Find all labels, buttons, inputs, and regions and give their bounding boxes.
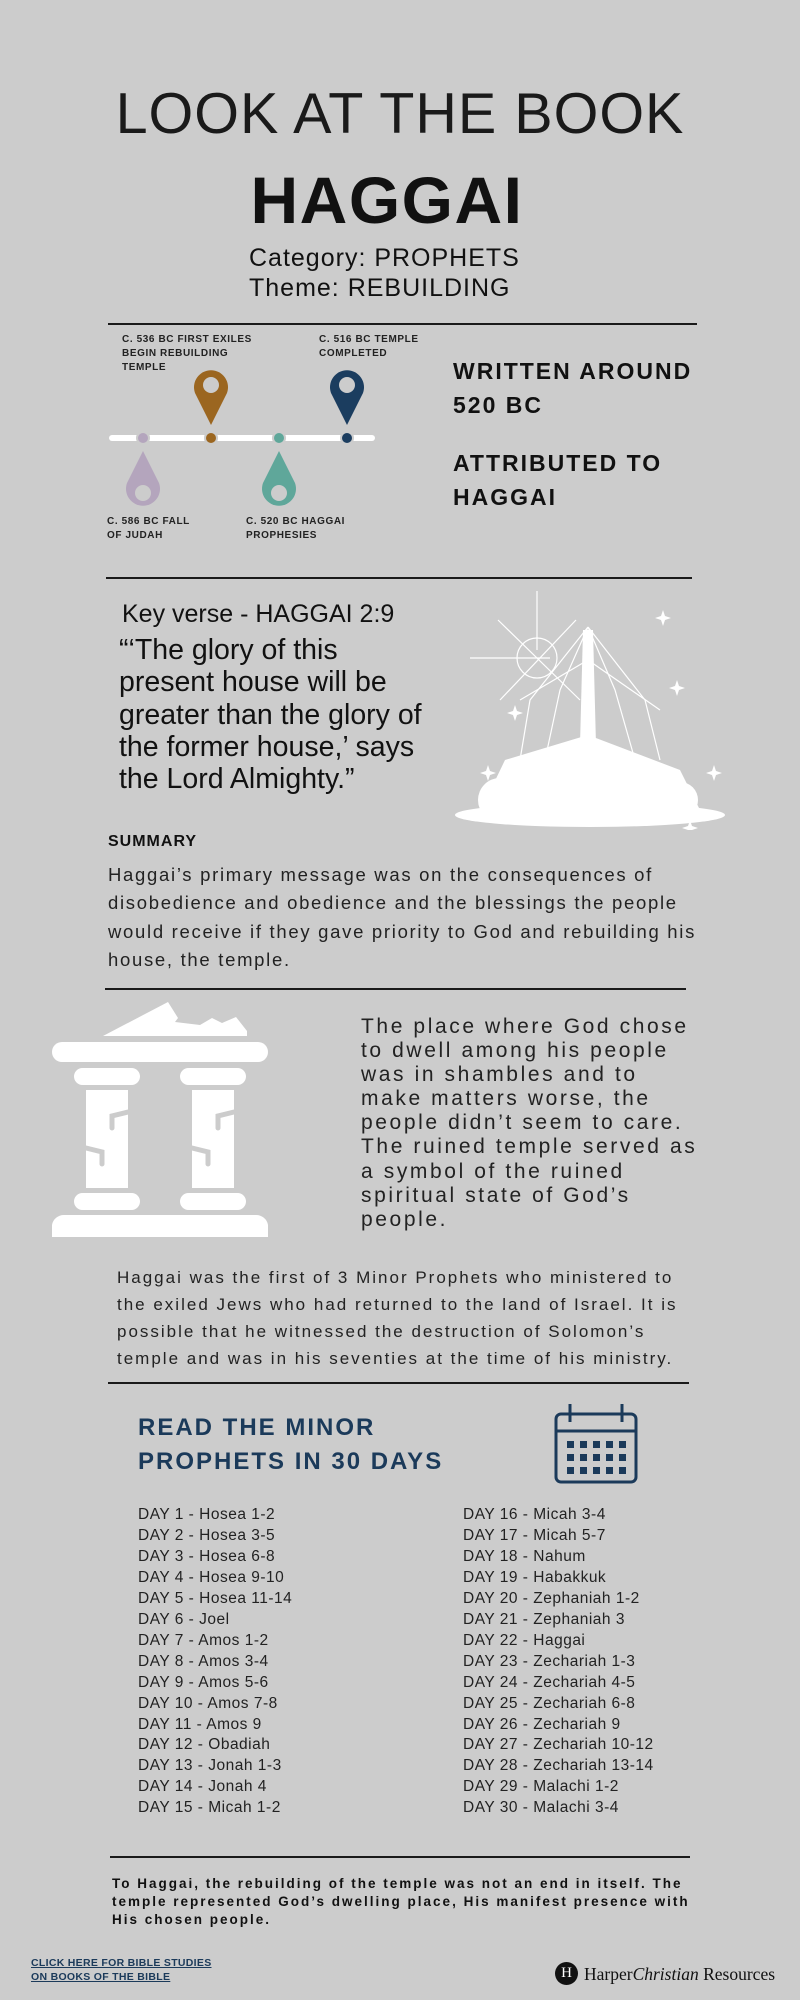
written around: 520 BC <box>453 392 543 418</box>
category and theme <box>249 244 520 302</box>
key verse quote <box>119 634 422 795</box>
Haggai background paragraph: temple and was in his seventies at the time of his ministry. <box>117 1349 673 1368</box>
summary text <box>108 864 696 970</box>
attributed to: ATTRIBUTED TO <box>453 450 662 476</box>
ruined temple paragraph: make matters worse, the <box>361 1087 651 1110</box>
icon: temple in clouds <box>455 591 725 830</box>
timeline labels top: C. 536 BC FIRST EXILES <box>122 334 252 345</box>
ruined temple paragraph <box>361 1015 697 1231</box>
attributed to <box>453 450 662 510</box>
timeline labels top: TEMPLE <box>122 362 166 373</box>
summary text: house, the temple. <box>108 949 291 970</box>
ruined temple paragraph: people didn’t seem to care. <box>361 1111 683 1134</box>
logo text: HarperChristian Resources <box>584 1964 775 1984</box>
footer link: CLICK HERE FOR BIBLE STUDIES <box>31 1957 212 1969</box>
summary heading: SUMMARY <box>108 833 197 850</box>
footer link: ON BOOKS OF THE BIBLE <box>31 1970 170 1982</box>
timeline <box>107 334 419 541</box>
reading list days 1-15: DAY 4 - Hosea 9-10 <box>138 1569 284 1586</box>
ruined temple paragraph: The ruined temple served as <box>361 1135 697 1158</box>
timeline: COMPLETED <box>319 348 387 359</box>
reading list days 1-15: DAY 11 - Amos 9 <box>138 1716 262 1733</box>
reading list days 16-30: DAY 18 - Nahum <box>463 1548 586 1565</box>
timeline labels bottom: OF JUDAH <box>107 530 163 541</box>
title: LOOK AT THE BOOK <box>116 82 684 146</box>
reading list days 1-15: DAY 13 - Jonah 1-3 <box>138 1757 282 1774</box>
reading list days 16-30: DAY 23 - Zechariah 1-3 <box>463 1653 635 1670</box>
reading plan heading: READ THE MINOR <box>138 1414 375 1441</box>
reading list days 1-15: DAY 14 - Jonah 4 <box>138 1778 267 1795</box>
reading list days 1-15: DAY 12 - Obadiah <box>138 1736 270 1753</box>
timeline: C. 520 BC HAGGAI <box>246 516 345 527</box>
timeline labels bottom <box>107 516 190 541</box>
category and theme: Category: PROPHETS <box>249 244 520 272</box>
logo <box>555 1962 775 1985</box>
ruined temple paragraph: a symbol of the ruined <box>361 1160 625 1183</box>
reading plan heading: PROPHETS IN 30 DAYS <box>138 1448 443 1475</box>
summary text: Haggai’s primary message was on the consequences of <box>108 864 653 885</box>
Haggai background paragraph: Haggai was the first of 3 Minor Prophets who ministered to <box>117 1268 673 1287</box>
footer link <box>31 1957 212 1982</box>
reading list days 1-15: DAY 10 - Amos 7-8 <box>138 1695 278 1712</box>
reading list days 1-15: DAY 2 - Hosea 3-5 <box>138 1527 275 1544</box>
closing statement <box>112 1876 690 1927</box>
closing statement: temple represented God’s dwelling place, His manifest presence with <box>112 1894 690 1909</box>
ruined temple paragraph: was in shambles and to <box>361 1063 638 1086</box>
reading list days 1-15: DAY 9 - Amos 5-6 <box>138 1674 269 1691</box>
icon: ruined temple <box>52 1002 268 1237</box>
timeline labels top <box>122 334 252 373</box>
reading list days 16-30: DAY 17 - Micah 5-7 <box>463 1527 606 1544</box>
Haggai background paragraph: possible that he witnessed the destruction of Solomon’s <box>117 1322 645 1341</box>
reading list days 16-30: DAY 22 - Haggai <box>463 1632 585 1649</box>
summary text: would receive if they gave priority to God and rebuilding his <box>108 921 696 942</box>
timeline: C. 516 BC TEMPLE <box>319 334 419 345</box>
logo mark <box>555 1962 578 1985</box>
reading list days 16-30: DAY 19 - Habakkuk <box>463 1569 606 1586</box>
written around <box>453 358 692 418</box>
ruined temple paragraph: people. <box>361 1208 448 1231</box>
Haggai background paragraph <box>117 1268 677 1368</box>
ruined temple paragraph: The place where God chose <box>361 1015 689 1038</box>
reading list days 16-30: DAY 27 - Zechariah 10-12 <box>463 1736 654 1753</box>
reading list days 16-30: DAY 28 - Zechariah 13-14 <box>463 1757 654 1774</box>
reading list days 1-15: DAY 6 - Joel <box>138 1611 230 1628</box>
written around: WRITTEN AROUND <box>453 358 692 384</box>
ruined temple paragraph: spiritual state of God’s <box>361 1184 631 1207</box>
ruined temple paragraph: to dwell among his people <box>361 1039 669 1062</box>
closing statement: His chosen people. <box>112 1912 271 1927</box>
timeline labels top: BEGIN REBUILDING <box>122 348 228 359</box>
key verse quote: the former house,’ says <box>119 731 414 763</box>
book name: HAGGAI <box>250 163 524 237</box>
summary text: disobedience and obedience and the blessings the people <box>108 892 678 913</box>
Haggai background paragraph: the exiled Jews who had returned to the land of Israel. It is <box>117 1295 677 1314</box>
timeline: PROPHESIES <box>246 530 317 541</box>
key verse quote: greater than the glory of <box>119 699 422 731</box>
reading list days 1-15: DAY 5 - Hosea 11-14 <box>138 1590 292 1607</box>
timeline graphic <box>109 370 375 506</box>
reading list days 16-30: DAY 16 - Micah 3-4 <box>463 1506 606 1523</box>
reading list days 16-30: DAY 20 - Zephaniah 1-2 <box>463 1590 640 1607</box>
reading list days 1-15: DAY 8 - Amos 3-4 <box>138 1653 269 1670</box>
closing statement: To Haggai, the rebuilding of the temple was not an end in itself. The <box>112 1876 683 1891</box>
reading list days 16-30: DAY 26 - Zechariah 9 <box>463 1716 621 1733</box>
reading list days 1-15: DAY 7 - Amos 1-2 <box>138 1632 269 1649</box>
logo mark: H <box>561 1965 572 1981</box>
key verse quote: the Lord Almighty.” <box>119 763 355 795</box>
reading list days 16-30 <box>463 1506 654 1816</box>
attributed to: HAGGAI <box>453 484 557 510</box>
reading list days 16-30: DAY 24 - Zechariah 4-5 <box>463 1674 635 1691</box>
reading list days 16-30: DAY 25 - Zechariah 6-8 <box>463 1695 635 1712</box>
reading list days 16-30: DAY 21 - Zephaniah 3 <box>463 1611 625 1628</box>
category and theme: Theme: REBUILDING <box>249 274 511 302</box>
timeline labels bottom: C. 586 BC FALL <box>107 516 190 527</box>
reading list days 16-30: DAY 30 - Malachi 3-4 <box>463 1799 619 1816</box>
key verse quote: “‘The glory of this <box>119 634 338 666</box>
key verse heading: Key verse - HAGGAI 2:9 <box>122 600 394 628</box>
icon: calendar <box>554 1404 638 1484</box>
reading list days 1-15 <box>138 1506 292 1816</box>
reading list days 1-15: DAY 1 - Hosea 1-2 <box>138 1506 275 1523</box>
reading list days 16-30: DAY 29 - Malachi 1-2 <box>463 1778 619 1795</box>
reading plan heading <box>138 1414 443 1475</box>
key verse quote: present house will be <box>119 666 387 698</box>
reading list days 1-15: DAY 15 - Micah 1-2 <box>138 1799 281 1816</box>
reading list days 1-15: DAY 3 - Hosea 6-8 <box>138 1548 275 1565</box>
